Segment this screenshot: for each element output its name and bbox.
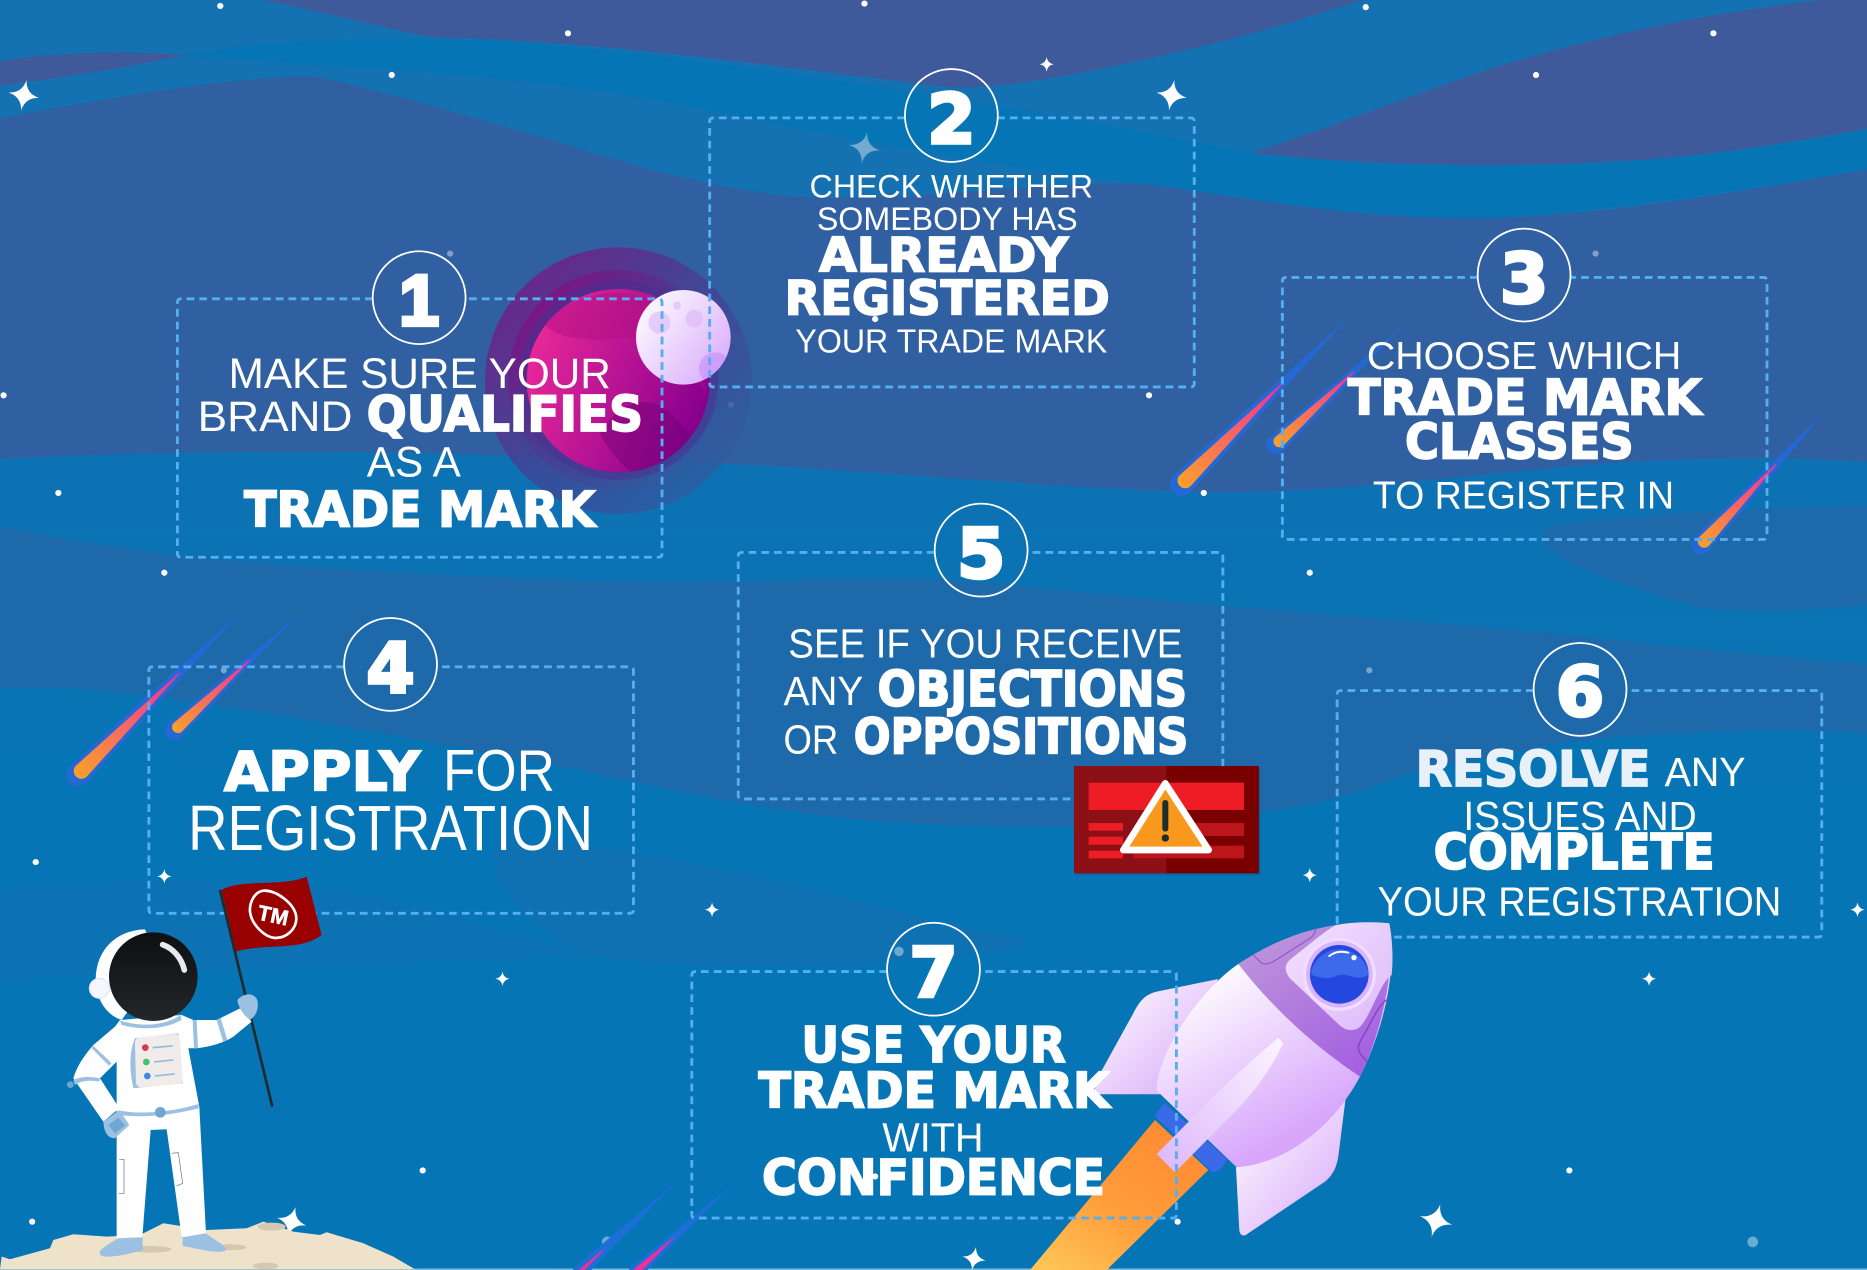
step 2 panel: 2 bbox=[927, 80, 975, 160]
illustration: astronaut on the moon with flag bbox=[0, 877, 415, 1269]
step 5 panel: 5 bbox=[957, 514, 1005, 594]
star behind ground bbox=[273, 1203, 310, 1240]
rocket body bbox=[1157, 923, 1392, 1167]
step 2 panel: YOUR TRADE MARK bbox=[795, 323, 1107, 360]
step 7 panel: WITH bbox=[882, 1114, 984, 1160]
step 3 panel: TO REGISTER IN bbox=[1373, 473, 1674, 517]
rocket window bbox=[1303, 938, 1376, 1011]
illustration: rocket bbox=[1030, 922, 1393, 1270]
step 2 panel: ALREADY bbox=[819, 228, 1069, 283]
flag bbox=[222, 877, 322, 952]
step 5 panel: ANY bbox=[783, 668, 863, 714]
step 1 panel: 1 bbox=[399, 261, 439, 341]
rocket back fin bbox=[1093, 979, 1218, 1094]
step 4 panel: REGISTRATION bbox=[188, 792, 593, 864]
step 5 panel: SEE IF YOU RECEIVE bbox=[788, 620, 1182, 666]
step 3 panel: CHOOSE WHICH bbox=[1367, 334, 1681, 378]
step 1 panel: BRAND bbox=[198, 393, 352, 441]
step 7 panel: CONFIDENCE bbox=[762, 1149, 1105, 1206]
rocket centre fin bbox=[1157, 1038, 1283, 1172]
step 1 panel: QUALIFIES bbox=[367, 386, 643, 443]
flag: TM bbox=[256, 901, 291, 931]
step 7 panel bbox=[692, 923, 1176, 1218]
step 5 panel bbox=[738, 504, 1223, 799]
step 7 panel: USE YOUR bbox=[801, 1017, 1066, 1074]
step 1 panel: AS A bbox=[367, 438, 461, 486]
step 7 panel: TRADE MARK bbox=[758, 1062, 1112, 1119]
step 7 panel: 7 bbox=[909, 934, 958, 1014]
step 2 panel: SOMEBODY HAS bbox=[817, 201, 1078, 237]
gloves and boots bbox=[100, 994, 258, 1257]
step 1 panel bbox=[177, 251, 662, 557]
step 4 panel bbox=[149, 618, 633, 913]
step 6 panel: COMPLETE bbox=[1434, 824, 1715, 881]
icon: warning window bbox=[1074, 766, 1260, 875]
step 4 panel: FOR bbox=[443, 739, 555, 804]
illustration: planet and moon bbox=[485, 247, 752, 514]
rocket nose bbox=[1286, 922, 1393, 1030]
step 6 panel: 6 bbox=[1556, 653, 1604, 733]
step 3 panel: TRADE MARK bbox=[1348, 369, 1704, 426]
step 6 panel bbox=[1337, 643, 1822, 937]
rocket engine bbox=[1155, 1103, 1227, 1172]
rocket flame bbox=[1030, 1120, 1208, 1270]
step 6 panel: ANY bbox=[1665, 749, 1746, 795]
helmet bbox=[89, 929, 198, 1021]
step 3 panel bbox=[1282, 229, 1767, 539]
astronaut body bbox=[67, 1008, 252, 1239]
step 1 panel: MAKE SURE YOUR bbox=[229, 350, 611, 398]
step 1 panel: TRADE MARK bbox=[244, 481, 597, 538]
step 4 panel: APPLY bbox=[224, 740, 422, 804]
step 3 panel: 3 bbox=[1500, 239, 1548, 319]
step 6 panel: RESOLVE bbox=[1416, 741, 1650, 798]
step 2 panel: REGISTERED bbox=[785, 271, 1110, 326]
flag pole bbox=[220, 890, 272, 1107]
chest panel bbox=[130, 1033, 183, 1088]
rocket purple band bbox=[1238, 923, 1391, 1077]
step 6 panel: ISSUES AND bbox=[1463, 793, 1697, 839]
step 3 panel: CLASSES bbox=[1405, 413, 1634, 470]
step 5 panel: OBJECTIONS bbox=[878, 661, 1187, 718]
step 2 panel bbox=[710, 69, 1194, 387]
step 4 panel: 4 bbox=[367, 629, 415, 709]
moon ground bbox=[0, 1222, 415, 1269]
step 2 panel: CHECK WHETHER bbox=[810, 169, 1093, 205]
step 5 panel: OR bbox=[783, 717, 838, 763]
comets bbox=[61, 310, 1830, 1270]
rocket lower fin bbox=[1236, 1098, 1346, 1235]
step 6 panel: YOUR REGISTRATION bbox=[1378, 879, 1781, 925]
step 5 panel: OPPOSITIONS bbox=[854, 709, 1188, 766]
